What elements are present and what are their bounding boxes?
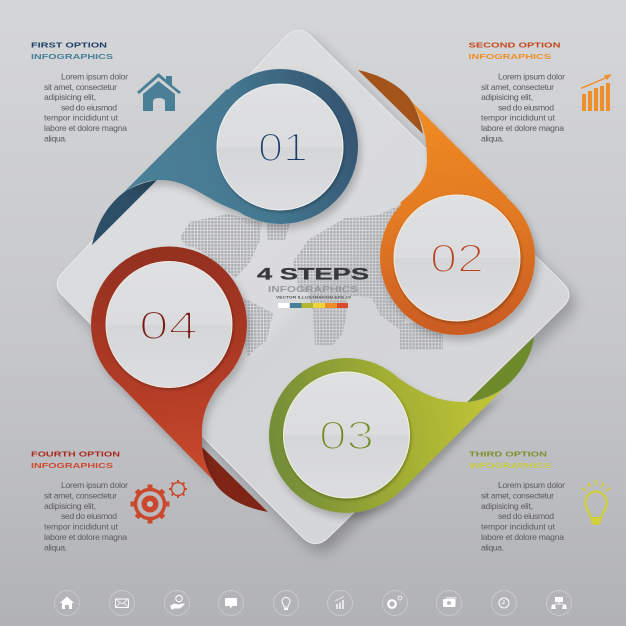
icon row	[54, 590, 572, 616]
text block: first option: aliqua.	[44, 134, 67, 144]
step 2 disc	[394, 195, 520, 321]
text block: first option: sed do eiusmod	[61, 102, 117, 112]
step 2 number: 02	[430, 237, 484, 281]
step 1 fold	[92, 180, 157, 245]
heading: third option	[469, 450, 551, 470]
panel: central diamond	[57, 30, 569, 544]
heading: fourth option: FOURTH OPTION	[31, 450, 120, 458]
world map	[180, 205, 443, 357]
heading: second option: INFOGRAPHICS	[468, 52, 551, 61]
text block: third option: aliqua.	[481, 542, 504, 552]
center title block: VECTOR ILLUSTRATION EPS 10	[276, 296, 351, 300]
text block: fourth option: sed do eiusmod	[61, 511, 117, 521]
mini icon: banknote	[436, 590, 462, 616]
heading: second option	[468, 40, 560, 61]
step 3	[269, 337, 534, 513]
text block: second option: sit amet, consectetur	[481, 82, 554, 92]
step 2	[358, 70, 535, 335]
step 2 fold	[358, 70, 423, 134]
heading: first option: INFOGRAPHICS	[31, 52, 113, 61]
text block: fourth option: tempor incididunt ut	[44, 522, 119, 532]
mini icon: bulb	[274, 590, 298, 616]
center title block: INFOGRAPHICS	[268, 284, 358, 294]
heading: third option: INFOGRAPHICS	[469, 461, 551, 470]
heading: third option: THIRD OPTION	[469, 450, 547, 458]
text block: first option	[44, 72, 128, 144]
text block: third option: labore et dolore magna	[481, 532, 564, 542]
step 4 number: 04	[139, 304, 198, 348]
icon: light bulb	[582, 480, 610, 525]
text block: third option: adipisicing elit,	[481, 501, 533, 511]
step 1 disc	[217, 84, 343, 210]
step 4 fold	[202, 447, 268, 512]
text block: first option: Lorem ipsum dolor	[61, 72, 128, 82]
step 2 ribbon	[380, 102, 535, 335]
center title block	[257, 266, 369, 308]
mini icon: home	[54, 590, 80, 616]
text block: second option: Lorem ipsum dolor	[498, 72, 565, 82]
step 4	[91, 246, 268, 512]
step 3 disc	[284, 372, 410, 498]
heading: second option: SECOND OPTION	[468, 40, 560, 50]
step 4 ribbon	[91, 246, 247, 480]
icon: gears	[130, 480, 187, 524]
mini icon: speech bubble	[218, 590, 244, 616]
heading: fourth option: INFOGRAPHICS	[31, 461, 113, 470]
step 3 number: 03	[319, 414, 374, 458]
colour strip	[278, 303, 348, 308]
text block: second option: tempor incididunt ut	[481, 112, 556, 122]
step 4 disc	[106, 262, 232, 388]
center title block: 4 STEPS	[257, 266, 369, 284]
icon: house	[137, 73, 181, 111]
text block: second option	[481, 72, 565, 144]
text block: second option: sed do eiusmod	[498, 102, 554, 112]
text block: fourth option: aliqua.	[44, 542, 67, 552]
step 1	[92, 69, 358, 245]
mini icon: chart	[328, 590, 352, 616]
text block: third option: sit amet, consectetur	[481, 490, 554, 500]
text block: fourth option: adipisicing elit,	[44, 501, 96, 511]
text block: fourth option: sit amet, consectetur	[44, 490, 117, 500]
mini icon: hierarchy	[546, 590, 572, 616]
text block: third option: Lorem ipsum dolor	[498, 480, 565, 490]
step 3 ribbon	[269, 358, 505, 513]
text block: third option: sed do eiusmod	[498, 511, 554, 521]
text block: second option: adipisicing elit,	[481, 92, 533, 102]
step 1 ribbon	[123, 69, 358, 224]
mini icon: clock	[492, 590, 516, 616]
heading: fourth option	[31, 450, 120, 470]
heading: first option	[31, 40, 113, 61]
icon: growth chart	[581, 74, 612, 111]
heading: first option: FIRST OPTION	[31, 40, 107, 50]
mini icon: mail	[110, 590, 134, 616]
text block: first option: adipisicing elit,	[44, 92, 96, 102]
text block: first option: tempor incididunt ut	[44, 112, 119, 122]
text block: fourth option	[44, 480, 128, 552]
step 1 number: 01	[258, 126, 308, 170]
text block: second option: labore et dolore magna	[481, 123, 564, 133]
text block: fourth option: Lorem ipsum dolor	[61, 480, 128, 490]
step 3 fold	[467, 337, 534, 402]
text block: third option: tempor incididunt ut	[481, 522, 556, 532]
mini icon: hand with coin	[164, 590, 190, 616]
text block: second option: aliqua.	[481, 134, 504, 144]
text block: first option: labore et dolore magna	[44, 123, 127, 133]
mini icon: gears	[382, 590, 408, 616]
text block: fourth option: labore et dolore magna	[44, 532, 127, 542]
text block: third option	[481, 480, 565, 552]
text block: first option: sit amet, consectetur	[44, 82, 117, 92]
